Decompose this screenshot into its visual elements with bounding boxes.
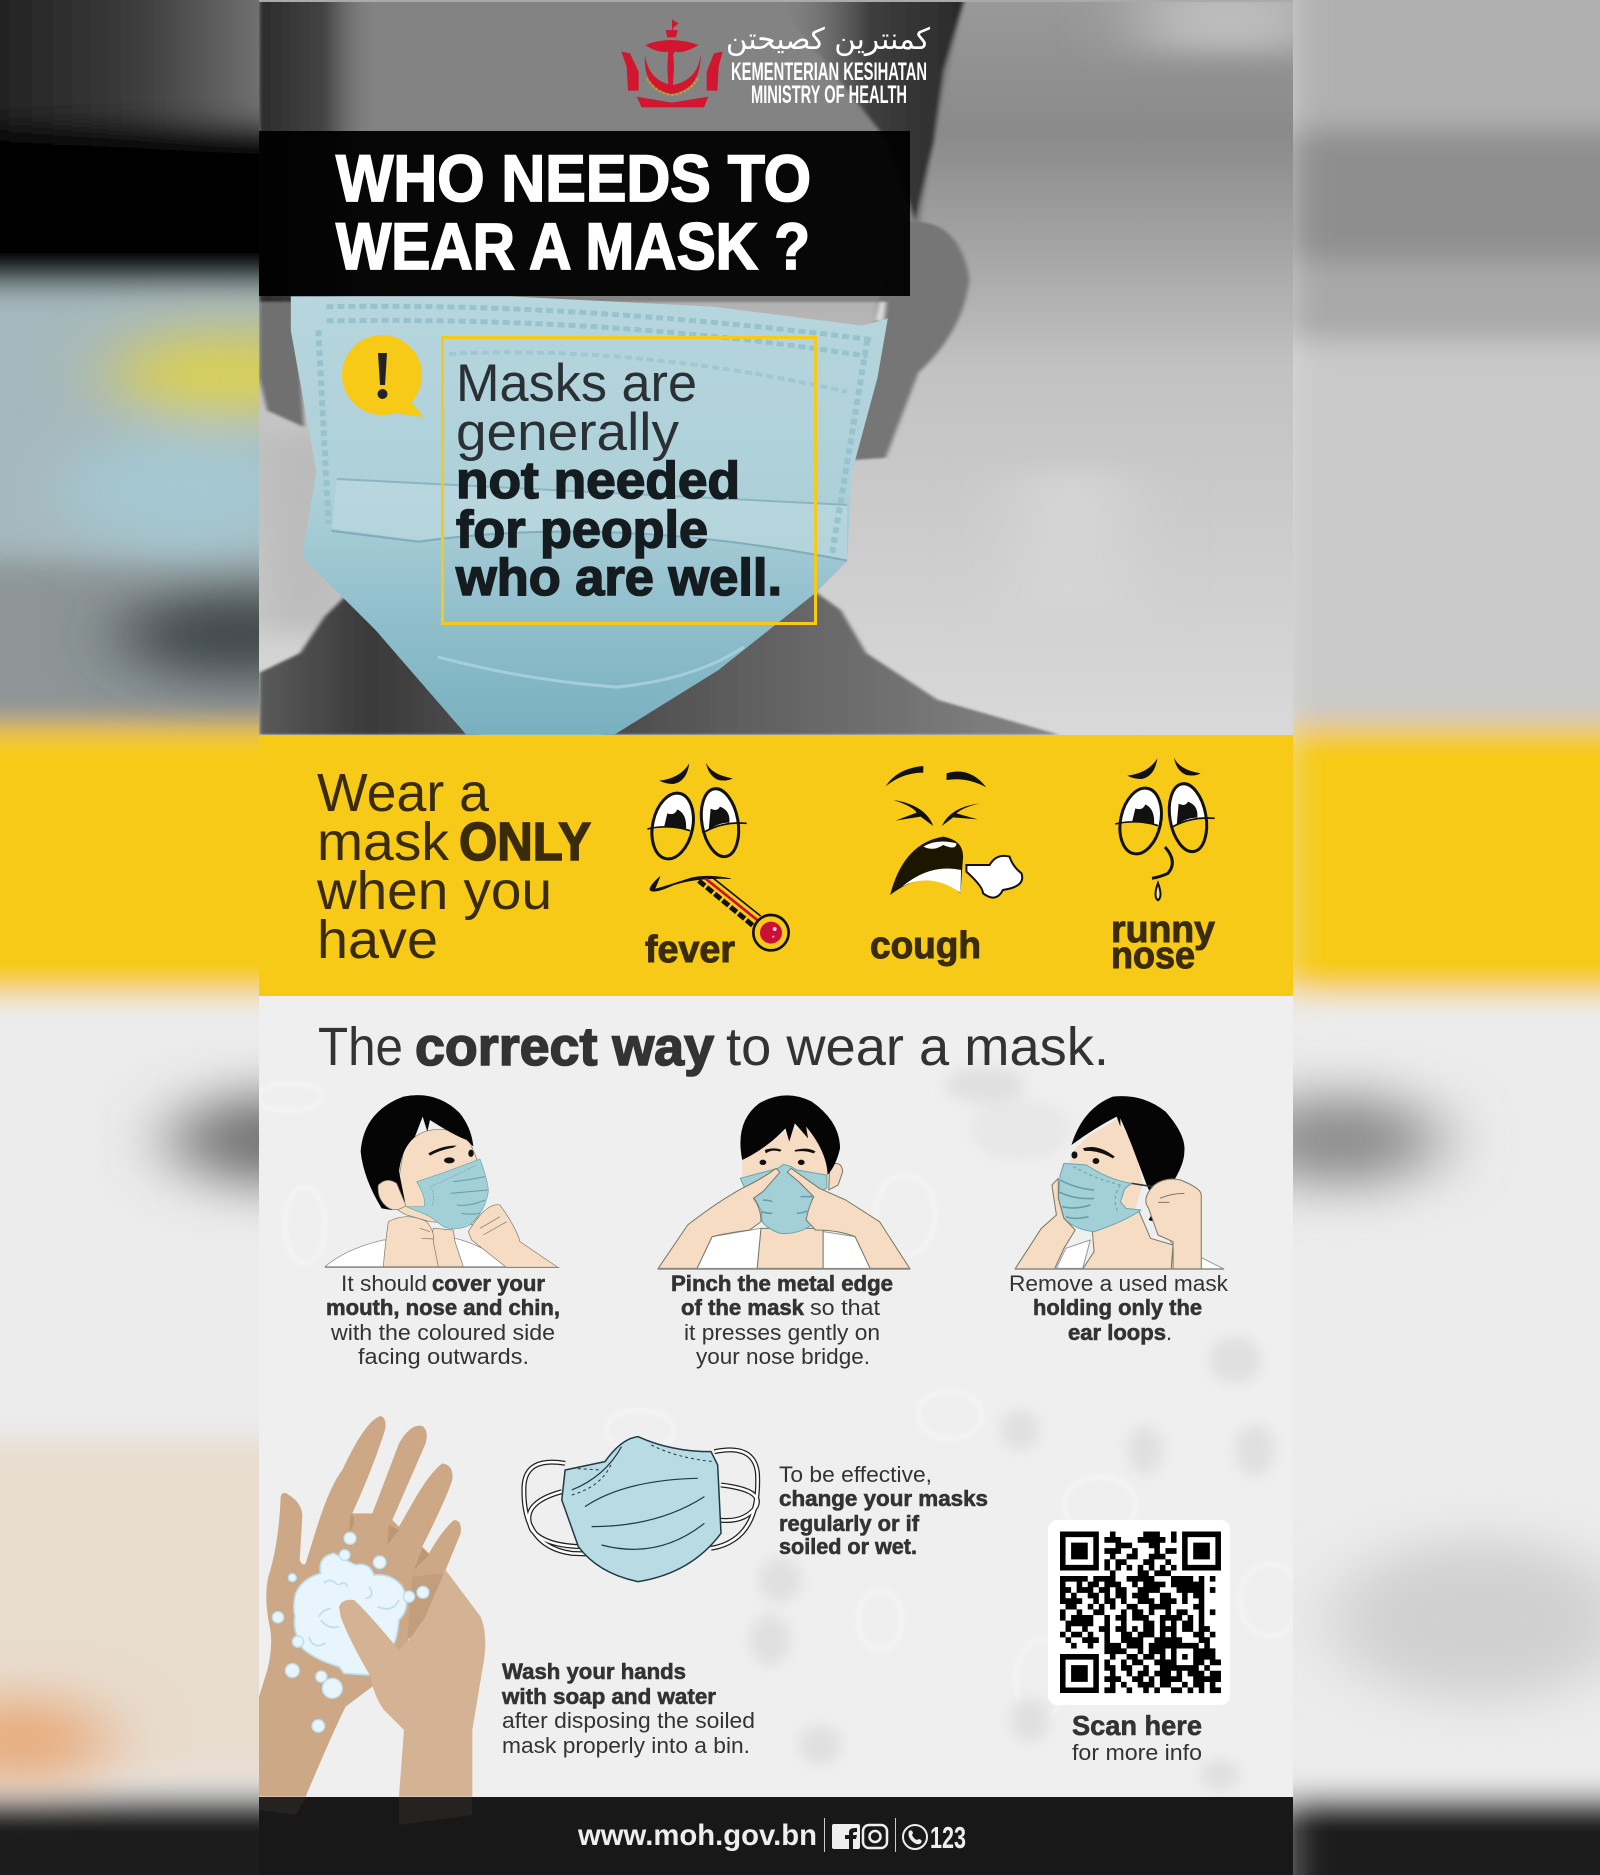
caption: cover your mouth: It should [341, 1271, 427, 1296]
blurred background: right side [1240, 0, 1600, 1875]
text: scan here: for more info [1072, 1740, 1202, 1765]
title text [336, 141, 811, 283]
label: runny nose: runny [1111, 909, 1215, 951]
label: cough: cough [870, 925, 981, 967]
text: wash your hands: mask properly into a bin. [502, 1733, 750, 1758]
caption: pinch the metal edge: your nose bridge. [696, 1344, 870, 1369]
caption: pinch the metal edge: of the mask [681, 1295, 805, 1320]
section heading: to wear a mask. [726, 1017, 1109, 1077]
panel: correct way to wear a mask [258, 996, 1300, 1797]
symptoms heading: when you [316, 861, 552, 921]
callout light text [456, 354, 697, 462]
caption: remove a used mask: . [1166, 1320, 1172, 1345]
text: change your masks: change your masks [779, 1486, 988, 1511]
text: scan here: Scan here [1072, 1710, 1202, 1741]
callout bold text [455, 452, 782, 607]
icon: phone [903, 1825, 927, 1849]
text: change your masks: To be effective, [779, 1462, 932, 1487]
panel: symptoms [259, 735, 1293, 996]
footer bar [259, 1797, 1293, 1875]
icon: exclamation speech bubble [342, 335, 424, 417]
caption: remove a used mask: holding only the [1033, 1295, 1202, 1320]
label: runny nose [1111, 909, 1215, 977]
caption: pinch the metal edge: so that [810, 1295, 880, 1320]
text: change your masks: soiled or wet. [779, 1534, 917, 1559]
text: wash your hands: after disposing the soiled [502, 1708, 755, 1733]
website address: www.moh.gov.bn [577, 1819, 817, 1852]
callout light text: Masks are [456, 354, 697, 413]
caption: cover your mouth: facing outwards. [358, 1344, 529, 1369]
symptoms heading: Wear a [317, 763, 490, 823]
title text: WEAR A MASK ? [336, 209, 810, 283]
section heading: The [318, 1017, 403, 1077]
text: wash your hands [501, 1659, 755, 1758]
callout bold text: not needed [456, 452, 740, 510]
caption: cover your mouth: with the coloured side [330, 1320, 555, 1345]
callout: masks not needed for the well [442, 338, 816, 624]
logo: Ministry of Health [621, 19, 931, 109]
icon: instagram [863, 1825, 887, 1848]
logo text: English: MINISTRY OF HEALTH [751, 81, 907, 109]
caption: cover your mouth: mouth, nose and chin, [326, 1295, 560, 1320]
label: fever: fever [645, 929, 735, 971]
crest [621, 19, 723, 107]
illustration: person pinching metal edge, front view [658, 1095, 910, 1269]
label: runny nose: nose [1111, 935, 1195, 977]
caption: cover your mouth [326, 1271, 560, 1369]
caption: remove a used mask: ear loops [1068, 1320, 1166, 1345]
section heading: correct way [415, 1017, 714, 1077]
illustration: person removing mask by ear loops [1015, 1096, 1224, 1269]
soap foam [272, 1532, 429, 1732]
logo text: Malay: KEMENTERIAN KESIHATAN [731, 58, 927, 86]
photo panel: man wearing a surgical mask [259, 0, 1316, 735]
photo: head [259, 0, 969, 460]
illustration: hands washing with soap [259, 1416, 485, 1797]
photo: neck and collar [259, 585, 1059, 735]
QR code [1048, 1520, 1230, 1705]
caption: cover your mouth: cover your [432, 1271, 545, 1296]
symptoms heading: have [317, 910, 438, 970]
icon: runny nose face [1114, 758, 1215, 900]
text: scan here [1072, 1710, 1202, 1765]
caption: remove a used mask: Remove a used mask [1009, 1271, 1229, 1296]
title text: WHO NEEDS TO [336, 141, 811, 215]
caption: pinch the metal edge: Pinch the metal edge [671, 1271, 893, 1296]
illustration: disposable mask [524, 1437, 758, 1582]
text: wash your hands: Wash your hands [502, 1659, 686, 1684]
text: change your masks [779, 1462, 988, 1559]
caption: pinch the metal edge [671, 1271, 893, 1369]
title banner [259, 131, 910, 296]
symptoms heading: mask [317, 812, 450, 872]
caption: pinch the metal edge: it presses gently on [684, 1320, 880, 1345]
icon: fever face [646, 763, 789, 950]
text: wash your hands: with soap and water [501, 1684, 716, 1709]
symptoms heading: ONLY [459, 812, 591, 872]
text: change your masks: regularly or if [779, 1511, 920, 1536]
logo text: Jawi: کمنترين کصيحتن [726, 22, 931, 56]
callout bold text: for people [456, 501, 708, 559]
background virus pattern [752, 1068, 1274, 1789]
callout bold text: who are well. [455, 549, 782, 607]
section heading [318, 1017, 1109, 1077]
blurred background: left side [0, 0, 390, 1875]
icon: cough face [885, 766, 1022, 898]
illustration: person adjusting mask, side view [325, 1095, 559, 1268]
photo: surgical mask [291, 296, 888, 735]
caption: remove a used mask [1009, 1271, 1229, 1345]
top hairline [259, 0, 1293, 2]
hotline number: 123 [930, 1820, 966, 1855]
symptoms heading [316, 763, 591, 970]
icon: facebook [832, 1824, 860, 1849]
callout light text: generally [456, 403, 680, 462]
photo: blurred backdrop [259, 0, 1316, 632]
